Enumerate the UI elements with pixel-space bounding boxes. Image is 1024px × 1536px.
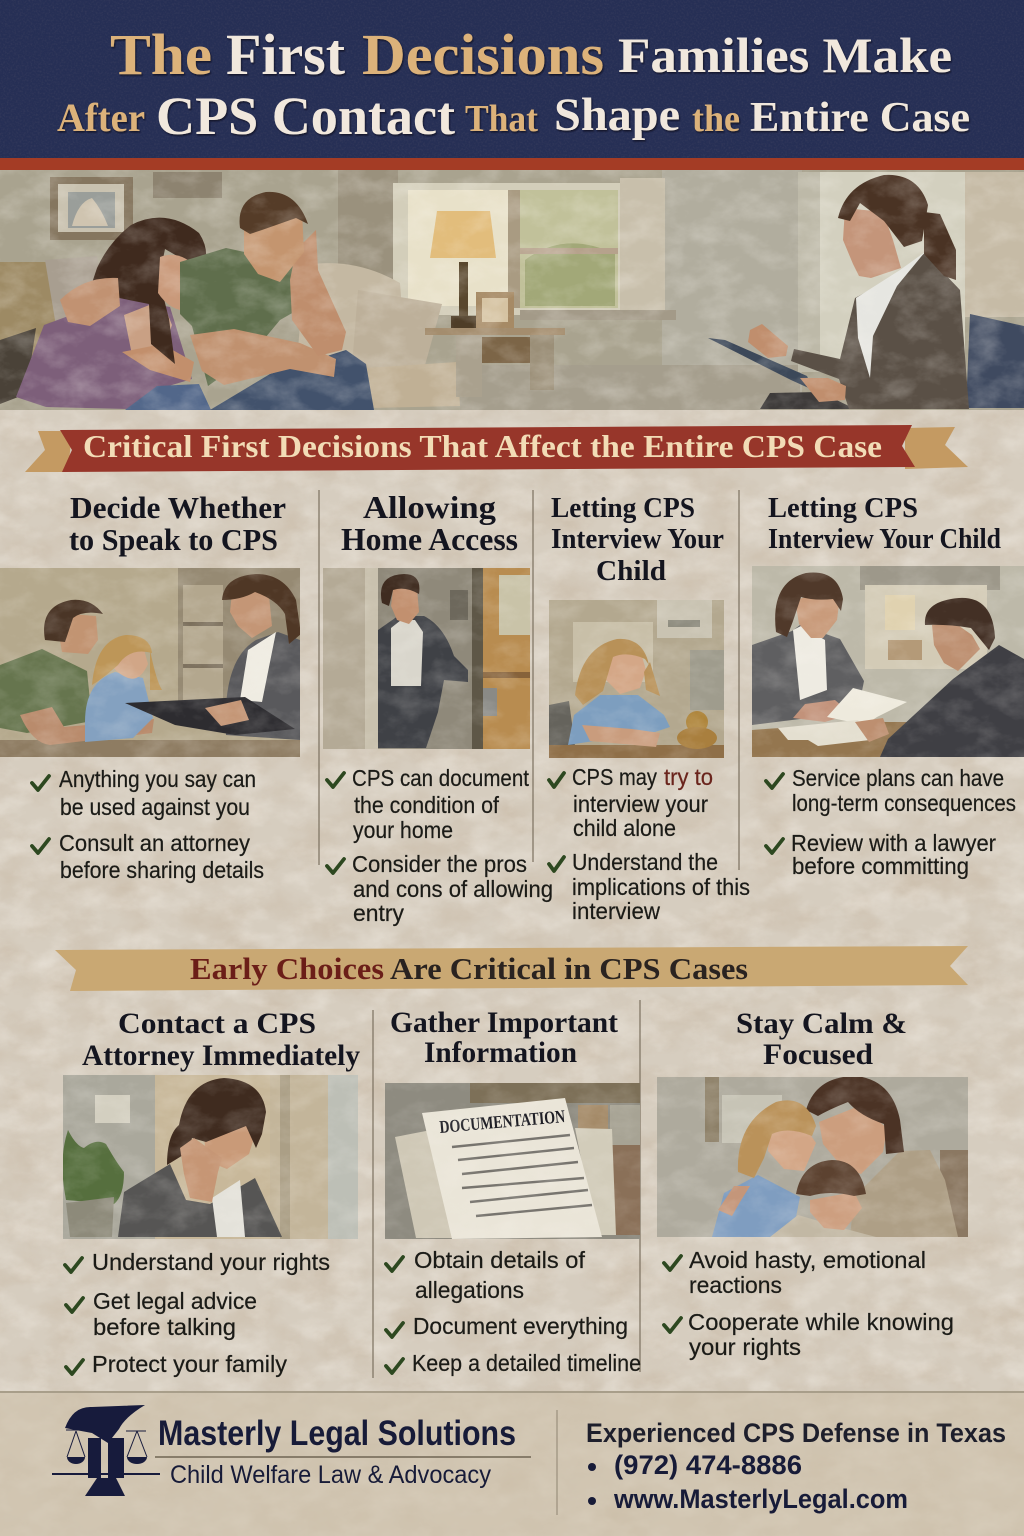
bullet: CPS may try to [549,764,713,841]
banner: early choices: Early Choices [190,951,384,986]
bullet: anything you say: Anything you say can [59,766,256,792]
heading [736,1007,907,1071]
heading [69,490,286,557]
bullet: review with a lawyer: Review with a lawyer [791,830,996,856]
title: the [692,98,740,140]
heading: Gather Important [390,1006,618,1039]
title: First [226,22,346,87]
contact details: Experienced CPS Defense in Texas [586,1418,1006,1448]
bullet: anything you say [32,766,256,820]
title: Decisions [362,22,604,87]
title header band [0,0,1024,170]
heading: Letting CPS [551,492,695,524]
heading: Focused [763,1038,873,1071]
bullet: avoid hasty reactions: Avoid hasty, emotional [689,1247,926,1273]
bullet: consult an attorney: Consult an attorney [59,830,250,856]
title: The [110,22,212,87]
heading: to Speak to CPS [69,522,278,557]
bullet: consider pros and cons [327,851,553,926]
bullet: get legal advice: before talking [93,1314,236,1340]
column dividers [319,490,739,870]
heading: Interview Your [551,523,724,555]
bullet: CPS may try to: try to [664,764,713,790]
bullet: get legal advice: Get legal advice [93,1288,257,1314]
bullet: consult an attorney: before sharing details [60,857,264,883]
wall frames [50,172,222,240]
heading: Decide Whether [70,490,286,525]
logo: scales of justice [52,1405,160,1496]
panel: letting CPS interview your child (2) [752,493,1024,879]
heading [82,1007,360,1072]
bullet: get legal advice [66,1288,257,1340]
bullet: CPS may try to: child alone [573,815,676,841]
bullet: avoid hasty reactions: reactions [689,1272,782,1298]
title: CPS Contact [156,86,455,146]
illustration: mother hugging children [657,1076,968,1237]
bullet: obtain details: Obtain details of [414,1247,586,1273]
illustration: documentation papers [385,1083,640,1239]
bullet: document everything: Document everything [413,1313,628,1339]
bullet: CPS may try to: interview your [573,791,708,817]
hero illustration: couple and CPS worker [0,170,1024,410]
bullet: keep a timeline: Keep a detailed timeline [412,1350,641,1376]
bullet: CPS can document: your home [353,817,453,843]
bullet: CPS can document: the condition of [354,792,500,818]
bullet: CPS can document: CPS can document [352,765,530,791]
title: Entire Case [750,95,970,141]
bullet: anything you say: be used against you [60,794,250,820]
title: That [465,98,538,140]
illustration: parent, child and worker [0,568,301,757]
heading [768,493,1001,555]
title: Shape [554,89,680,141]
heading: Information [424,1036,577,1069]
bullet: CPS can document [327,765,530,843]
illustration: person at doorway [323,568,530,749]
banner: early choices: Are Critical in CPS Cases [390,951,748,986]
heading: Contact a CPS [118,1007,316,1040]
side table with lamp [425,211,565,397]
banner: early choices [55,946,968,991]
bullet: CPS may try to: CPS may [572,764,657,790]
bullet: obtain details [386,1247,586,1303]
bullet: review with a lawyer: before committing [792,853,969,879]
contact details: www.MasterlyLegal.com [613,1484,908,1514]
panel: stay calm and focused [657,1007,968,1360]
illustration: child with teddy bear [549,600,724,758]
bullet: review with a lawyer [766,830,996,879]
illustration: worker reviewing papers with man [752,566,1024,757]
heading [390,1006,618,1069]
title: Families Make [618,27,952,83]
father [180,192,374,410]
banner: critical first decisions: Critical First Decisions That Affect the Entire CPS Case [83,428,882,464]
heading: Home Access [341,521,518,557]
title: After [57,95,145,140]
bullet: understand the implications [549,849,750,924]
heading [551,492,724,587]
bullet: consider pros and cons: entry [353,900,404,926]
bullet: protect your family: Protect your family [92,1351,288,1377]
contact details: (972) 474-8886 [614,1450,802,1480]
firm name and tagline [155,1414,531,1489]
illustration: documentation papers: DOCUMENTATION [439,1106,566,1137]
bullet: cooperate [664,1309,954,1360]
bullet: understand the implications: Understand the [572,849,718,875]
bullet: service plans [766,765,1016,816]
bullet: cooperate: your rights [689,1334,801,1360]
heading: Allowing [363,489,496,525]
banner: critical first decisions [25,425,968,472]
panel: letting CPS interview your child (1) [549,492,750,924]
sofa [0,256,460,408]
bullet: avoid hasty reactions [664,1247,926,1298]
lower section dividers [373,1000,640,1378]
bullet: understand the implications: implications of this [572,874,750,900]
illustration: woman on phone [62,1075,358,1239]
heading: Stay Calm & [736,1007,907,1040]
heading: Letting CPS [768,493,918,524]
contact details [586,1418,1006,1514]
heading: Interview Your Child [768,524,1001,555]
bullet: service plans: Service plans can have [792,765,1004,791]
heading [341,489,518,557]
panel: decide whether to speak to CPS [0,490,301,883]
mother [16,218,211,410]
title [57,22,970,146]
footer band [0,1391,1024,1536]
right wall panel and curtain [798,172,1024,372]
firm name and tagline: Masterly Legal Solutions [158,1414,516,1453]
CPS worker [708,175,1024,409]
footer divider [556,1410,558,1515]
bullet: consider pros and cons: and cons of allowing [353,876,553,902]
heading: Child [596,555,666,587]
panel: gather important information [385,1006,641,1376]
panel: contact a CPS attorney [62,1007,360,1377]
bullet: consider pros and cons: Consider the pros [352,851,527,877]
heading: Attorney Immediately [82,1039,360,1072]
panel: allowing home access [323,489,553,926]
bullet: understand the implications: interview [572,898,660,924]
bullet: obtain details: allegations [415,1277,524,1303]
window and curtains [393,178,676,320]
bullet: cooperate: Cooperate while knowing [688,1309,954,1335]
firm name and tagline: Child Welfare Law & Advocacy [170,1461,491,1489]
bullet: consult an attorney [32,830,264,883]
bullet: understand your rights: Understand your rights [92,1249,330,1275]
